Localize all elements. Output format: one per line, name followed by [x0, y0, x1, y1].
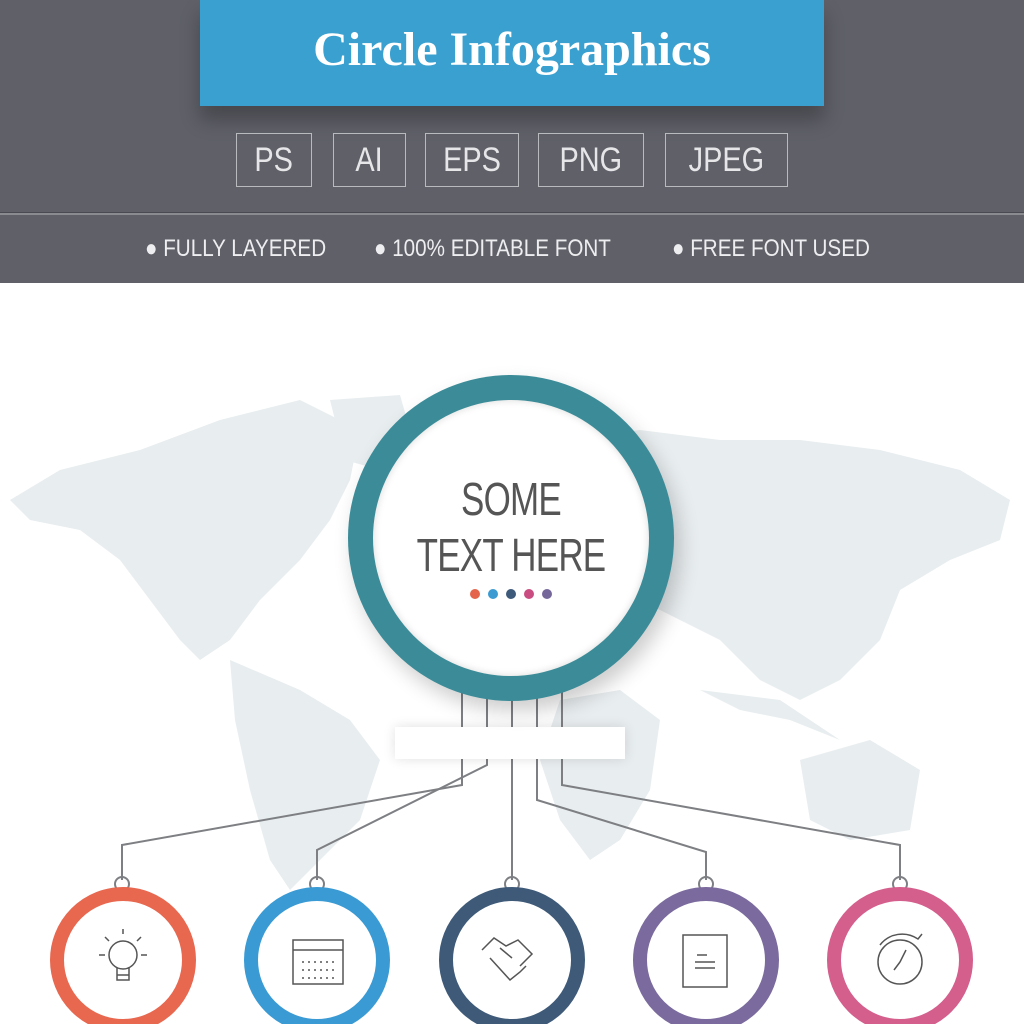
world map	[10, 395, 1010, 890]
format badges	[236, 133, 788, 187]
title banner: Circle Infographics	[313, 23, 711, 76]
center text: SOME	[461, 473, 561, 525]
format badges: PS	[255, 141, 293, 179]
format badges: PNG	[560, 141, 622, 179]
feature list	[145, 235, 870, 262]
bottom circles	[50, 887, 973, 1024]
format badges: EPS	[443, 141, 501, 179]
feature list: ● FULLY LAYERED	[145, 235, 326, 262]
icon: handshake	[482, 938, 532, 980]
format badges: AI	[356, 141, 383, 179]
format badges: JPEG	[689, 141, 764, 179]
icon: clock	[878, 934, 922, 984]
feature list: ● FREE FONT USED	[672, 235, 870, 262]
icon: notebook	[683, 935, 727, 987]
icon: calendar	[293, 940, 343, 984]
feature list: ● 100% EDITABLE FONT	[374, 235, 611, 262]
colored dots	[470, 589, 552, 599]
central circle	[348, 375, 674, 701]
white band	[395, 727, 625, 759]
title banner	[200, 0, 824, 106]
icon: bulb	[99, 929, 147, 980]
center text	[417, 473, 605, 581]
header panel	[0, 0, 1024, 283]
center text: TEXT HERE	[417, 529, 605, 581]
